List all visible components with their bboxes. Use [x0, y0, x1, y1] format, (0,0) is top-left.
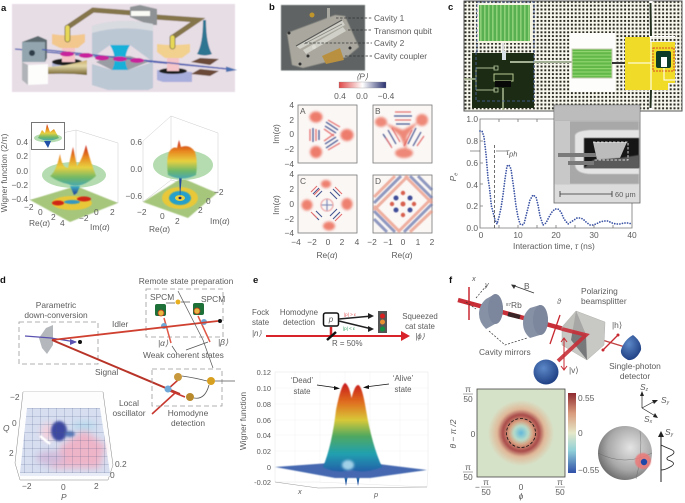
- axis titles: Re(α): [391, 250, 413, 260]
- right Wigner 3D plot: −0.6: [125, 191, 142, 201]
- label b: b: [269, 2, 275, 13]
- oscillation plot: 0.0: [466, 223, 478, 233]
- label d: d: [0, 275, 6, 286]
- Q-function surface: Q: [3, 423, 10, 433]
- axis tick labels: 4: [355, 237, 360, 247]
- source box: down-conversion: [24, 310, 88, 320]
- dashed leader lines: [305, 18, 372, 56]
- remote preparation box: |β⟩: [218, 337, 229, 347]
- Stokes axes: S: [644, 414, 650, 424]
- homodyne scheme: p: [328, 315, 334, 324]
- colour scale: 0.4: [334, 91, 346, 101]
- heat map: 0: [471, 429, 476, 439]
- oscillation plot: ph: [508, 150, 517, 158]
- cavity mirror 1: [479, 294, 503, 329]
- label f: f: [449, 275, 453, 286]
- x title: Interaction time, τ (ns): [513, 241, 595, 251]
- y label: e: [454, 173, 460, 176]
- Wigner surface plot: p: [373, 490, 378, 499]
- homodyne box: Homodyne: [168, 408, 209, 418]
- SEM inset: [554, 105, 640, 203]
- optical setup: |v⟩: [569, 365, 579, 375]
- colour scale: −0.4: [378, 91, 395, 101]
- dead annotation: ‘Dead’: [291, 376, 313, 385]
- alive annotation: ‘Alive’: [393, 374, 414, 383]
- optical setup: |h⟩: [612, 320, 622, 330]
- y title: Wigner function: [238, 392, 248, 450]
- heat map: θ − π /2: [448, 419, 458, 449]
- axis tick labels: 0: [289, 129, 294, 139]
- colour scale: 0.55: [578, 393, 595, 403]
- device labels: [374, 13, 433, 61]
- device labels: Cavity 2: [374, 38, 405, 48]
- Sy distribution: y: [670, 432, 674, 438]
- axis tick labels: −1: [383, 237, 393, 247]
- source box: [19, 300, 98, 364]
- homodyne scheme: Homodyne: [280, 308, 319, 317]
- axis tick labels: −4: [291, 237, 301, 247]
- heat map: 0: [519, 482, 524, 492]
- homodyne box: oscillator: [112, 408, 146, 418]
- axis tick labels: 4: [289, 100, 294, 110]
- optical setup: Single-photon: [609, 361, 661, 371]
- homodyne scheme: cat state: [405, 322, 436, 331]
- right Wigner 3D plot: −2: [137, 207, 147, 217]
- optical setup: y: [484, 280, 490, 289]
- tau_ph marker: [494, 145, 496, 228]
- homodyne scheme: [252, 308, 438, 348]
- axis tick labels: 2: [289, 184, 294, 194]
- homodyne scheme: |ϕ⟩: [415, 332, 425, 341]
- y label: P: [448, 176, 458, 181]
- heat map: 50: [463, 472, 473, 482]
- homodyne scheme: |p| > ε: [344, 312, 356, 317]
- Wigner surface plot: state: [293, 387, 311, 396]
- axis tick labels: 0: [289, 199, 294, 209]
- homodyne scheme: |p| < ε: [343, 326, 355, 331]
- optical setup: ϑ: [557, 297, 562, 306]
- axis tick labels: 0: [401, 237, 406, 247]
- axis tick labels: π: [465, 384, 471, 394]
- axis tick labels: −2: [367, 237, 377, 247]
- optical setup: x: [471, 274, 476, 283]
- axis tick labels: [284, 100, 435, 247]
- remote preparation box: SPCM: [150, 292, 174, 302]
- Q-function surface: 0: [110, 470, 115, 480]
- left Wigner 3D plot: −0.2: [11, 180, 28, 190]
- right Wigner 3D plot: Im(α): [210, 216, 230, 226]
- Wigner surface plot: 0.04: [257, 431, 271, 440]
- Bloch sphere: [598, 426, 652, 480]
- y ticks: 1.0: [466, 114, 478, 124]
- Sy distribution: [658, 427, 674, 482]
- Wigner surface plot: 0.02: [257, 447, 271, 456]
- map A: A: [300, 106, 306, 116]
- chip micrograph: [464, 1, 682, 111]
- cavity QED apparatus illustration: [12, 4, 237, 92]
- axis labels: Re(α): [149, 224, 170, 234]
- oscillation plot: 20: [551, 230, 561, 240]
- heat map: π: [557, 477, 563, 487]
- Wigner surface plot: x: [297, 487, 302, 496]
- traffic light: [378, 311, 387, 333]
- oscillation plot: τ: [506, 147, 509, 157]
- axis ticks: 0.6: [130, 137, 142, 147]
- left Wigner 3D plot: Im(α): [90, 222, 110, 232]
- remote preparation box: [139, 276, 234, 348]
- right Wigner 3D plot: 2: [175, 216, 180, 226]
- label a: a: [1, 3, 7, 14]
- axis tick labels: −2: [284, 144, 294, 154]
- Q-function surface: 0: [61, 482, 66, 492]
- left Wigner 3D plot: [0, 122, 118, 232]
- Wigner surface plot: 0: [267, 463, 271, 472]
- Q-function surface: 0.2: [115, 459, 127, 469]
- Stokes axes: S: [640, 382, 646, 392]
- left Wigner 3D plot: 2: [51, 212, 56, 222]
- axis tick labels: −2: [284, 214, 294, 224]
- panel d: remote state preparation: [0, 275, 235, 502]
- remote preparation box: |α⟩: [158, 338, 169, 348]
- panel a: cavity setup and Wigner plots: [0, 3, 237, 234]
- homodyne scheme: state: [252, 318, 270, 327]
- homodyne box: [112, 369, 235, 428]
- left Wigner 3D plot: 0.0: [16, 166, 28, 176]
- Wigner surface plot: 0.10: [257, 384, 271, 393]
- right Wigner 3D plot: 0: [160, 211, 165, 221]
- oscillation plot: 40: [627, 230, 637, 240]
- oscillation plot: 0.2: [466, 201, 478, 211]
- colour scale: 0.0: [356, 91, 368, 101]
- map D: D: [375, 176, 381, 186]
- homodyne box: detection: [171, 418, 205, 428]
- beams: Idler: [112, 319, 129, 329]
- oscillation plot: 0.8: [466, 136, 478, 146]
- Wigner surface plot: 0.08: [257, 400, 271, 409]
- panel c: superconducting chip and oscillation plot: [448, 1, 682, 251]
- Q-function surface: −2: [22, 481, 32, 491]
- colour scale: 0: [578, 428, 583, 438]
- oscillation plot: [448, 114, 637, 251]
- remote preparation box: SPCM: [201, 294, 225, 304]
- axis ticks: −2: [24, 202, 34, 212]
- axis tick labels: 4: [289, 169, 294, 179]
- axis tick labels: 2: [340, 237, 345, 247]
- oscillation plot: 0.4: [466, 180, 478, 190]
- weak coherent states label: Weak coherent states: [143, 350, 224, 360]
- homodyne scheme: Fock: [252, 308, 269, 317]
- axis tick labels: −2: [307, 237, 317, 247]
- homodyne scheme: R = 50%: [332, 339, 362, 348]
- axis tick labels: −4: [284, 228, 294, 238]
- homodyne box: Local: [119, 398, 139, 408]
- axis titles: Im(α): [271, 195, 281, 215]
- left Wigner 3D plot: 4: [60, 218, 65, 228]
- z axis ticks: 0.4: [16, 137, 28, 147]
- homodyne scheme: |n⟩: [252, 329, 262, 338]
- optical setup: Cavity mirrors: [479, 347, 531, 357]
- device labels: Cavity coupler: [374, 51, 427, 61]
- heat map: π: [465, 462, 471, 472]
- Stokes axes: S: [661, 395, 667, 405]
- device photograph: [281, 5, 365, 70]
- colour scale: [568, 393, 600, 475]
- right Wigner 3D plot: 0: [206, 196, 211, 206]
- optical setup: beamsplitter: [581, 296, 627, 306]
- inset Wigner plot: [32, 122, 64, 150]
- beams: Signal: [95, 367, 118, 377]
- axis tick labels: 0: [326, 237, 331, 247]
- right Wigner 3D plot: −2: [214, 187, 224, 197]
- Q-function surface: P: [61, 492, 67, 502]
- homodyne scheme: Squeezed: [402, 312, 438, 321]
- panel e: squeezed cat state: [238, 275, 438, 499]
- oscillation plot: 10: [513, 230, 523, 240]
- axis tick labels: 2: [430, 237, 435, 247]
- map A: [298, 105, 357, 163]
- heat map: π: [483, 477, 489, 487]
- Q-function surface: −2: [10, 392, 20, 402]
- axis labels: Re(α): [29, 218, 50, 228]
- label e: e: [253, 275, 258, 286]
- left Wigner 3D plot: 0: [94, 207, 99, 217]
- heat map: 50: [481, 487, 491, 497]
- axis titles: Im(α): [271, 124, 281, 144]
- heat map: [448, 384, 600, 501]
- Wigner surface plot: [238, 368, 428, 499]
- label c: c: [448, 2, 453, 13]
- x ticks: 0: [479, 230, 484, 240]
- Q-function surface: 2: [9, 448, 14, 458]
- map D: [373, 175, 432, 233]
- optical setup: 87: [506, 302, 512, 307]
- Wigner surface plot: state: [394, 385, 412, 394]
- heat map: −: [475, 482, 480, 492]
- right Wigner 3D plot: [125, 116, 230, 234]
- optical setup: B: [524, 281, 530, 291]
- right Wigner 3D plot: 0.0: [130, 164, 142, 174]
- optical setup: detector: [620, 371, 650, 381]
- right Wigner 3D plot: 2: [198, 205, 203, 215]
- Stokes axes: [640, 382, 670, 425]
- optical setup: [458, 274, 661, 384]
- panel b: two-cavity device and cat state maps: [269, 2, 435, 260]
- axis tick labels: 2: [289, 115, 294, 125]
- left Wigner 3D plot: 2: [110, 207, 115, 217]
- map B: B: [375, 106, 381, 116]
- Wigner surface plot: -0.02: [254, 478, 271, 487]
- optical setup: Polarizing: [581, 286, 618, 296]
- heat map: ϕ: [519, 491, 524, 501]
- Q-function surface: 2: [94, 481, 99, 491]
- axis tick labels: 1: [416, 237, 421, 247]
- panel f: polarization measurement: [448, 274, 674, 501]
- tick labels: 0.12: [257, 368, 271, 377]
- beams: [52, 319, 218, 414]
- axis titles: [271, 124, 413, 260]
- heat map: 50: [463, 394, 473, 404]
- source box: Parametric: [36, 300, 76, 310]
- device labels: Cavity 1: [374, 13, 405, 23]
- homodyne scheme: detection: [283, 318, 315, 327]
- Stokes axes: y: [666, 400, 670, 406]
- left Wigner 3D plot: −0.4: [11, 194, 28, 204]
- left Wigner 3D plot: −2: [79, 213, 89, 223]
- cavity mirror 2: [523, 305, 548, 338]
- SEM inset: 60 μm: [615, 190, 636, 199]
- Sy distribution: S: [665, 427, 671, 437]
- oscillation plot: 30: [589, 230, 599, 240]
- colour scale: [334, 72, 395, 101]
- data points: [480, 131, 632, 225]
- Stokes axes: z: [645, 387, 649, 393]
- device labels: Transmon qubit: [374, 26, 433, 36]
- Q-function surface: 0: [12, 418, 17, 428]
- map B: [373, 105, 432, 163]
- map C: C: [300, 176, 306, 186]
- map C: [298, 175, 357, 233]
- left Wigner 3D plot: 0: [38, 207, 43, 217]
- axis titles: Re(α): [316, 250, 338, 260]
- left Wigner 3D plot: 0.2: [16, 151, 28, 161]
- Wigner surface plot: 0.06: [257, 416, 271, 425]
- optical setup: Rb: [511, 300, 522, 310]
- Q-function surface: [3, 392, 127, 502]
- remote preparation box: Remote state preparation: [139, 276, 234, 286]
- oscillation plot: 0.6: [466, 158, 478, 168]
- leader lines: [172, 291, 213, 368]
- axis tick labels: −4: [284, 159, 294, 169]
- Stokes axes: x: [649, 419, 653, 425]
- colour scale: −0.55: [578, 465, 600, 475]
- heat map: 50: [555, 487, 565, 497]
- colour scale: ⟨P⟩: [356, 72, 369, 82]
